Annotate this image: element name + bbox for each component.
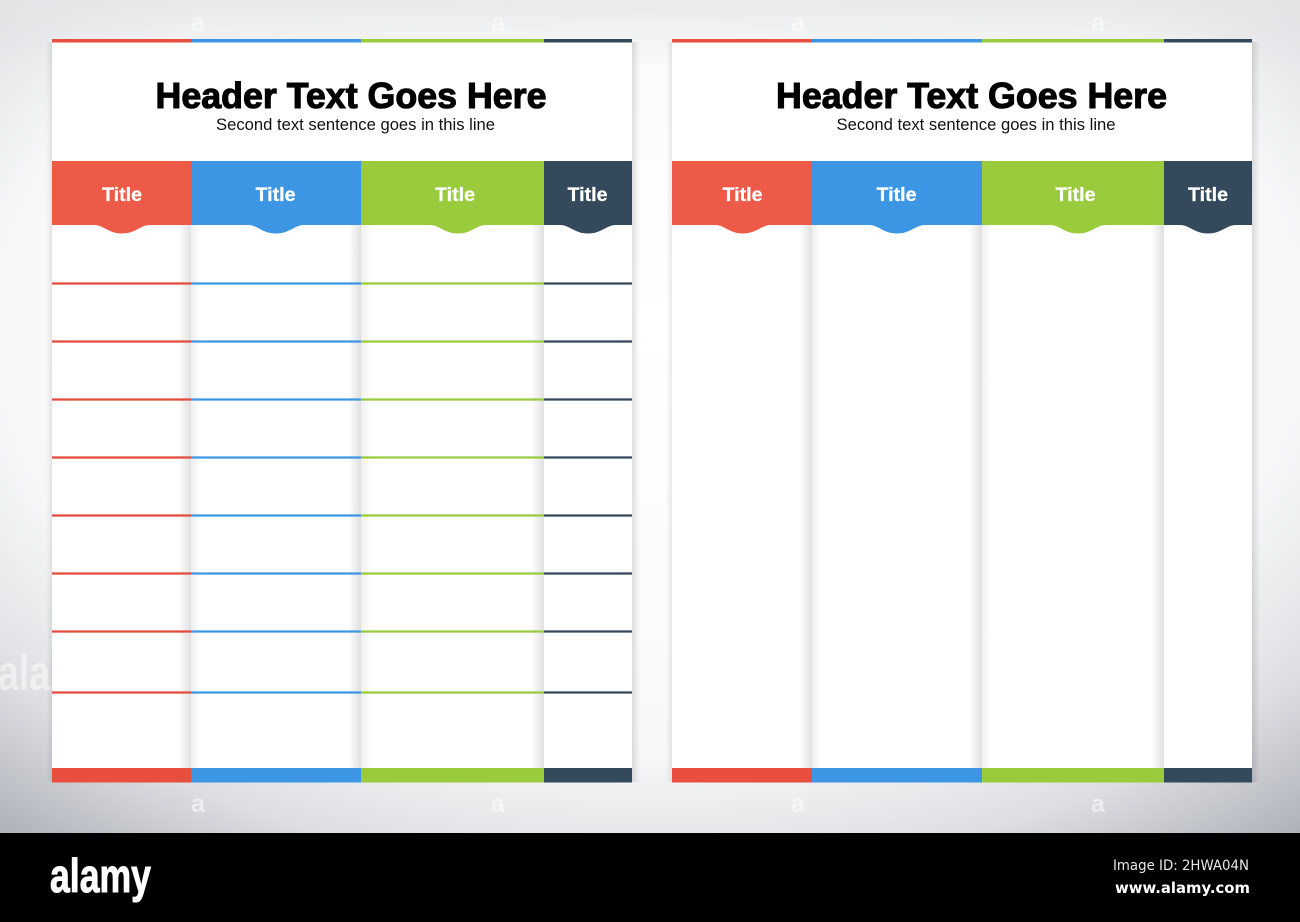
- column header: blue: [812, 161, 982, 234]
- footer colour bar: [52, 768, 632, 782]
- column header: navy: Title: [568, 185, 608, 206]
- column header: blue: Title: [876, 185, 916, 206]
- column header: green: [982, 161, 1164, 234]
- background top shade: [0, 0, 1300, 70]
- subheading: Second text sentence goes in this line: [836, 116, 1116, 134]
- column header: navy: [544, 161, 632, 234]
- logo: alamy: alamy: [50, 849, 151, 902]
- website: www.alamy.com: [1115, 879, 1250, 897]
- column header: green: Title: [435, 185, 475, 206]
- panel: right table: [666, 39, 1260, 782]
- column header: navy: Title: [1188, 185, 1228, 206]
- watermark wordmark: ala: [0, 645, 51, 701]
- column header: red: Title: [722, 185, 762, 206]
- heading: Header Text Goes Here: [776, 75, 1167, 116]
- top colour strip: [52, 39, 632, 42]
- column header: red: [52, 161, 191, 234]
- column header: blue: Title: [256, 185, 296, 206]
- column header: navy: [1164, 161, 1252, 234]
- top colour strip: [672, 39, 1252, 42]
- row rules: [52, 284, 632, 692]
- watermark letters: a: [191, 9, 206, 37]
- column header: red: Title: [102, 185, 142, 206]
- image id: Image ID: 2HWA04N: [1113, 858, 1249, 874]
- watermark letters: a: [491, 9, 506, 37]
- watermark letters: a: [791, 790, 806, 818]
- watermark letters: a: [791, 9, 806, 37]
- watermark letters: a: [1091, 9, 1106, 37]
- subheading: Second text sentence goes in this line: [216, 116, 495, 134]
- bottom credit bar: [0, 833, 1300, 922]
- column header: green: [361, 161, 544, 234]
- column shadows: [178, 225, 544, 768]
- column header: red: [672, 161, 812, 234]
- column shadows: [799, 225, 1164, 768]
- column header: blue: [191, 161, 361, 234]
- panel: left table: [46, 39, 640, 782]
- watermark letters: [191, 9, 1106, 818]
- footer colour bar: [672, 768, 1252, 782]
- watermark letters: a: [1091, 790, 1106, 818]
- heading: Header Text Goes Here: [156, 75, 546, 116]
- column header: green: Title: [1056, 185, 1096, 206]
- watermark letters: a: [491, 790, 506, 818]
- watermark letters: a: [191, 790, 206, 818]
